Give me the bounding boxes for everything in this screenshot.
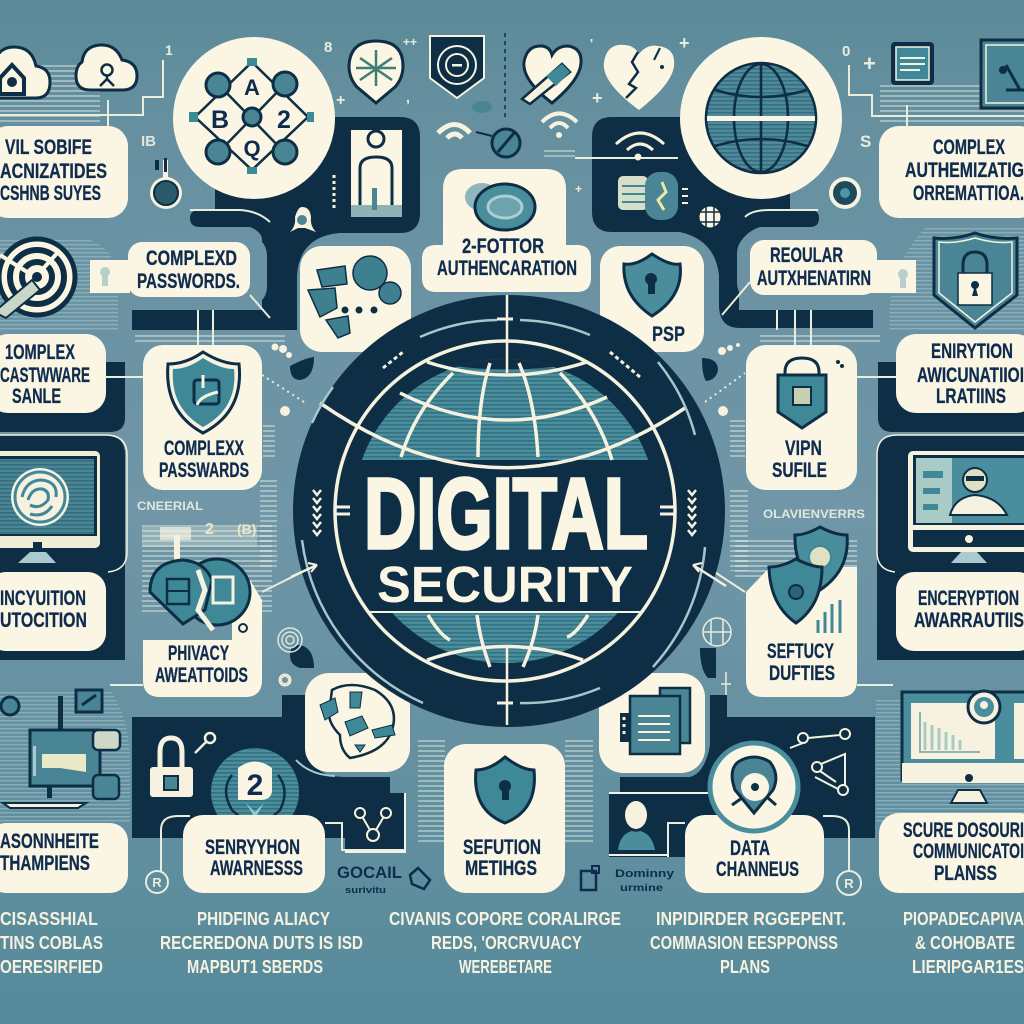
icon: heart with pen [522,46,581,104]
text: community label: Dominny [615,868,675,880]
panel: sentry awareness card: SENRYYHON [205,836,300,859]
panel: top-left info card: CSHNB SUYES [0,182,101,205]
text: side captions: OLAVIENVERRS [763,507,865,521]
decorative glyph labels top: 0 [842,43,850,60]
icon: network diagram circle: Q [243,136,261,161]
decorative glyph labels top: + [863,51,876,76]
decorative glyph labels top: IB [141,133,156,150]
panel: two-factor authentication card: AUTHENCARATION [437,257,577,280]
panel: left lower card: INCYUITION [0,587,86,610]
icon: small gear dot [279,674,291,686]
panel: bottom documents card [599,673,705,773]
decorative glyph labels top: + [679,33,690,53]
icon: panel wifi [616,133,664,159]
panel: left lower card [0,572,106,651]
cut-outs around short cards [128,233,877,307]
decorative glyph labels top [141,33,876,196]
decorative glyph labels top: 8 [324,39,332,56]
panel: safety duties card: DUFTIES [769,662,835,685]
icon: network diagram circle: A [244,75,260,100]
panel: left complex card: SANLE [12,385,61,408]
panel: complexd passwords card [90,242,250,297]
panel: privacy awareness card [143,527,262,697]
text: side captions: (B) [237,521,256,537]
panel: solution meetings card: SEFUTION [463,836,541,859]
panel: data channels card [685,815,824,893]
icon: small fingerprint [278,628,302,652]
central emblem: globe and title: SECURITY [377,556,633,613]
panel: sentry awareness card [183,815,325,893]
decorative glyph labels top: + [575,182,582,196]
icon: R badge left [146,871,168,893]
icon: plus marks lower [721,672,731,695]
panel: left complex card: CASTWWARE [0,364,90,387]
footer text column 1: CISASSHIAL [0,909,98,929]
panel: left complex card: 1OMPLEX [5,341,75,364]
panel: PSP shield card [600,246,704,352]
decorative glyph labels top: S [860,132,871,151]
panel: solution meetings card [444,744,565,893]
text: side captions: 2 [205,521,214,538]
icon: house cloud [0,47,50,98]
icon: R badge right: R [844,876,854,891]
footer text column 4: COMMASION EESPPONSS [650,933,838,953]
icon: shield with lock [934,233,1017,328]
icon: hooded figure [290,207,316,232]
footer text column 3 [389,909,621,977]
icon: wifi left [438,124,470,138]
panel: two-factor authentication card: 2-FOTTOR [462,235,544,258]
panel: solution meetings card: METIHGS [465,857,537,880]
panel: top-left info card: ACNIZATIDES [0,160,107,183]
footer text column 1 [0,909,103,977]
icon: network diagram circle [173,37,335,199]
panel: complex passwords shield card: COMPLEXX [164,437,244,460]
icon: person badge [334,130,402,217]
icon: target pin circle [710,743,798,831]
panel: world map card [300,246,411,352]
footer text column 1: TINS COBLAS [0,933,103,953]
text: side captions [137,499,865,538]
panel: right encryption card [896,334,1024,413]
icon: right monitor figure [908,451,1024,563]
panel: regular authentication card: REOULAR [770,244,843,267]
footer text column 3: CIVANIS COPORE CORALIRGE [389,909,621,929]
panel: secure document plans card: PLANSS [934,862,997,885]
icon: R badge right [837,871,861,895]
decorative glyph labels top: + [592,88,603,108]
footer text column 3: REDS, 'ORCRVUACY [431,933,582,953]
footer text column 1: OERESIRFIED [0,957,103,977]
decorative glyph labels top: ' [590,36,593,51]
text: goal label [337,863,430,895]
icon: network diagram circle: 2 [277,106,291,134]
text: side captions: CNEERIAL [137,499,203,513]
panel: top-right info card [879,126,1024,218]
panel: VPN card: VIPN [785,437,822,460]
panel: safety duties card: SEFTUCY [767,640,834,663]
icon: globe circle [680,37,842,199]
decorative glyph labels top: 1 [165,42,173,58]
panel: sentry awareness card: AWARNESSS [210,857,303,880]
panel: regular authentication card: AUTXHENATIRN [757,267,871,290]
panel: regular authentication card [750,240,916,295]
panel: secure document plans card [879,813,1024,893]
icon: left desktop computer [1,690,120,808]
icon: broken heart [604,45,674,110]
icon: framed screen [981,40,1024,108]
panel: top-right navy connector [592,117,873,328]
icon: padlock [150,738,193,797]
panel: bottom-left card [0,823,128,893]
panel: VPN card: SUFILE [772,459,827,482]
icon: wifi centre [542,114,577,158]
icon: pin [349,41,403,103]
decorative glyph labels top: + [336,92,345,109]
icon: two badge circle: 2 [247,769,263,802]
panel: top-left info card: VIL SOBIFE [5,136,92,159]
text: goal label: surivitu [345,885,386,895]
footer text column 3: WEREBETARE [459,957,552,977]
panel: VPN card [746,345,857,490]
panel: right navy side blocks [877,362,1024,660]
footer text column 4: INPIDIRDER RGGEPENT. [656,909,846,929]
panel: bottom-right navy connector [609,695,875,857]
icon: person cloud [76,45,137,90]
decorative dots and leaves around ring [262,343,745,678]
text: community label [581,866,675,894]
panel: privacy awareness card: PHIVACY [168,642,229,665]
icon: right desktop computer [902,691,1024,803]
icon: R badge left: R [152,875,162,890]
striped background patches [0,65,1024,842]
central emblem: globe and title: DIGITAL [364,458,648,570]
panel: safety duties card [746,527,857,697]
footer text column 2: PHIDFING ALIACY [197,909,330,929]
connector lines [0,60,1024,871]
footer text column 2: RECEREDONA DUTS IS ISD [160,933,363,953]
panel: complex passwords shield card: PASSWARDS [159,459,249,482]
panel: data channels card: CHANNEUS [716,858,799,881]
central emblem: globe and title [291,295,726,727]
decorative glyph labels top: , [406,89,410,105]
panel: bottom-left card: ASONNHEITE [0,830,99,853]
icon: document tile [891,42,934,85]
panel: complex passwords shield card [143,345,262,490]
decorative glyph labels top: ++ [403,35,417,49]
icon: lens right [829,177,861,209]
panel: bottom-left navy connector [132,695,405,852]
icon: target with arrow [0,237,77,318]
panel: left navy side blocks [0,362,127,660]
panel: privacy awareness card: AWEATTOIDS [155,664,248,687]
icon: small globe [699,206,721,228]
icon: crosshair dial [703,618,731,646]
panel: complexd passwords card: PASSWORDS. [137,270,240,293]
icon: key [195,733,215,753]
panel: top-left info card [0,126,128,218]
footer text column 2: MAPBUT1 SBERDS [187,957,323,977]
icon: two badge circle [211,748,299,836]
text: community label: urmine [620,883,664,894]
panel: top-left navy connector [132,117,420,330]
icon: network nodes left [355,808,391,841]
icon: network diagram circle: B [211,106,229,134]
footer text column 2 [160,909,363,977]
panel: PSP shield card: PSP [652,323,685,346]
icon: lens [150,158,182,209]
panel: complexd passwords card: COMPLEXD [146,247,237,270]
icon: person [618,801,655,850]
text: goal label: GOCAIL [337,863,402,882]
panel: left lower card: UTOCITION [0,609,87,632]
icon: badge shield [430,36,484,98]
panel: left complex card [0,334,106,413]
footer text column 5 [903,909,1024,977]
icon: left monitor fingerprint [0,451,100,563]
panel: bottom-left card: THAMPIENS [0,852,90,875]
panel: right lower card [896,572,1024,651]
icon: network nodes right [790,729,850,795]
panel: two-factor authentication card [422,169,591,292]
footer text column 4: PLANS [720,957,770,977]
panel: bottom map card [305,673,410,772]
icon: blocked circle [472,33,520,157]
panel: data channels card: DATA [730,837,770,860]
footer text column 4 [650,909,846,977]
icon: chip and brain [618,172,688,220]
